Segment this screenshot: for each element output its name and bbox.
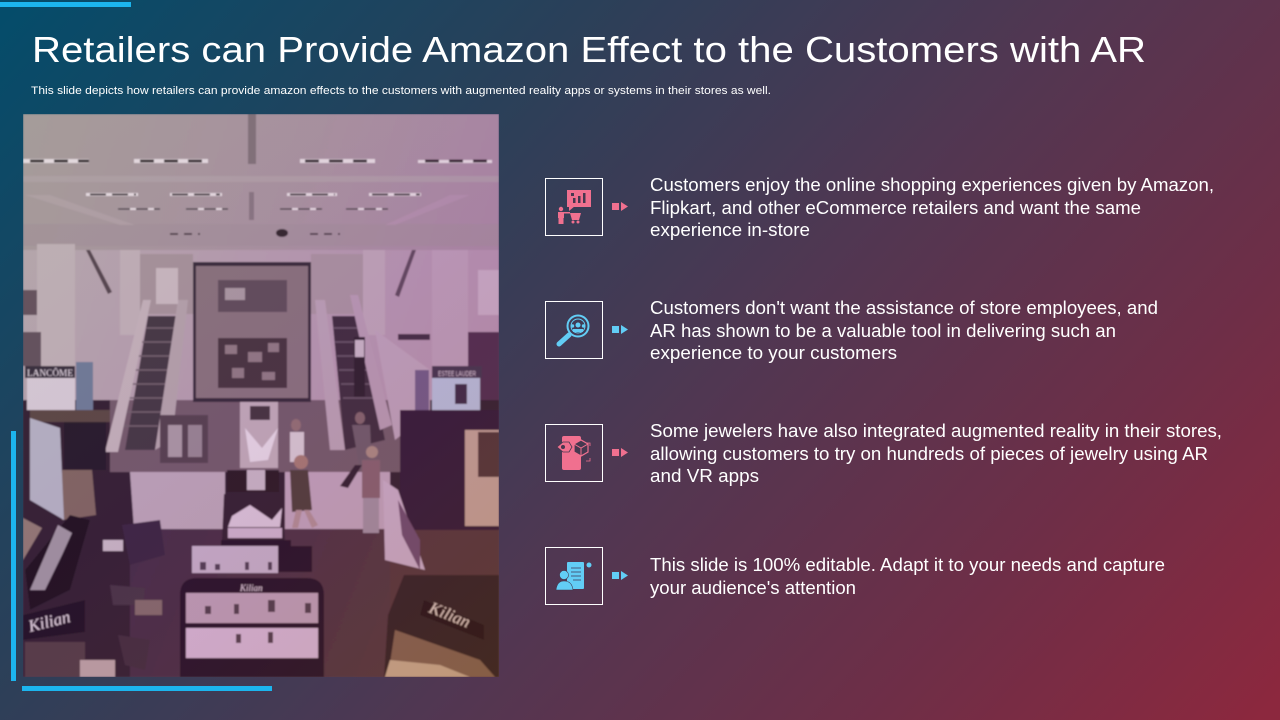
icon box 1: [546, 178, 602, 236]
photo: ceiling: [23, 114, 499, 254]
arrow 3: [612, 448, 628, 457]
icon box 2: [546, 302, 602, 358]
arrow 4: [612, 571, 628, 580]
text block 4: This slide is 100% editable. Adapt it to your needs and capture: [650, 555, 1165, 575]
photo: brand boards: ESTEE LAUDER: [438, 371, 476, 378]
icon box 3: [546, 424, 602, 482]
arrow 1: [612, 202, 628, 211]
text block 1: experience in-store: [650, 220, 810, 240]
icon: magnifier with people: [559, 316, 588, 344]
photo: brand boards: LANCÔME: [27, 368, 74, 378]
row 2: no store assistance: [546, 298, 1158, 363]
text block 4: [650, 555, 1165, 598]
icon: shopper with chart and cart: [558, 190, 591, 224]
photo: shoppers: [290, 412, 380, 533]
bottom accent bar: [22, 686, 272, 691]
text block 1: Customers enjoy the online shopping experiences given by Amazon,: [650, 175, 1214, 195]
photo: central display wall: [193, 262, 311, 402]
arrow 2: [612, 325, 628, 334]
text block 2: experience to your customers: [650, 343, 897, 363]
icon: person with scroll: [556, 562, 592, 590]
text block 3: and VR apps: [650, 466, 759, 486]
photo: left black display case: [23, 410, 165, 677]
photo: department store interior with escalators: [23, 114, 499, 677]
photo: left escalator: [105, 268, 188, 452]
photo: centre perfume counter: [180, 470, 324, 677]
photo: right Kilian counter: [384, 575, 499, 677]
photo: brand boards: [25, 362, 482, 412]
title: Retailers can Provide Amazon Effect to the Customers with AR: [32, 29, 1146, 70]
subtitle: This slide depicts how retailers can provide amazon effects to the customers with augmented reality apps or systems in their stores as well.: [31, 85, 771, 97]
text block 3: [650, 421, 1222, 486]
text block 2: [650, 298, 1158, 363]
photo: right Kilian counter: Kilian: [426, 598, 473, 632]
top accent bar: [0, 2, 131, 7]
photo: centre perfume counter: Kilian: [239, 583, 263, 593]
icon: phone with eye and AR cube: [557, 436, 590, 470]
row 4: editable note: [546, 548, 1165, 604]
text block 3: Some jewelers have also integrated augmented reality in their stores,: [650, 421, 1222, 441]
left accent bar: [11, 431, 16, 681]
text block 3: allowing customers to try on hundreds of pieces of jewelry using AR: [650, 444, 1208, 464]
text block 2: Customers don't want the assistance of store employees, and: [650, 298, 1158, 318]
photo: colour tint overlay: [23, 114, 499, 677]
photo: right escalator: [315, 295, 430, 450]
icon box 4: [546, 548, 602, 604]
text block 1: Flipkart, and other eCommerce retailers and want the same: [650, 198, 1141, 218]
text block 2: AR has shown to be a valuable tool in delivering such an: [650, 321, 1116, 341]
photo: lower hall base: [23, 400, 499, 677]
row 3: jewelers AR: [546, 421, 1222, 486]
row 1: online shopping: [546, 175, 1214, 240]
photo: right shop unit: [383, 410, 499, 570]
photo: back wall and columns: [23, 244, 499, 402]
photo: left black display case: Kilian: [25, 607, 72, 636]
text block 1: [650, 175, 1214, 240]
text block 4: your audience's attention: [650, 578, 856, 598]
photo: mid floor pedestal and kiosks: [160, 402, 278, 468]
